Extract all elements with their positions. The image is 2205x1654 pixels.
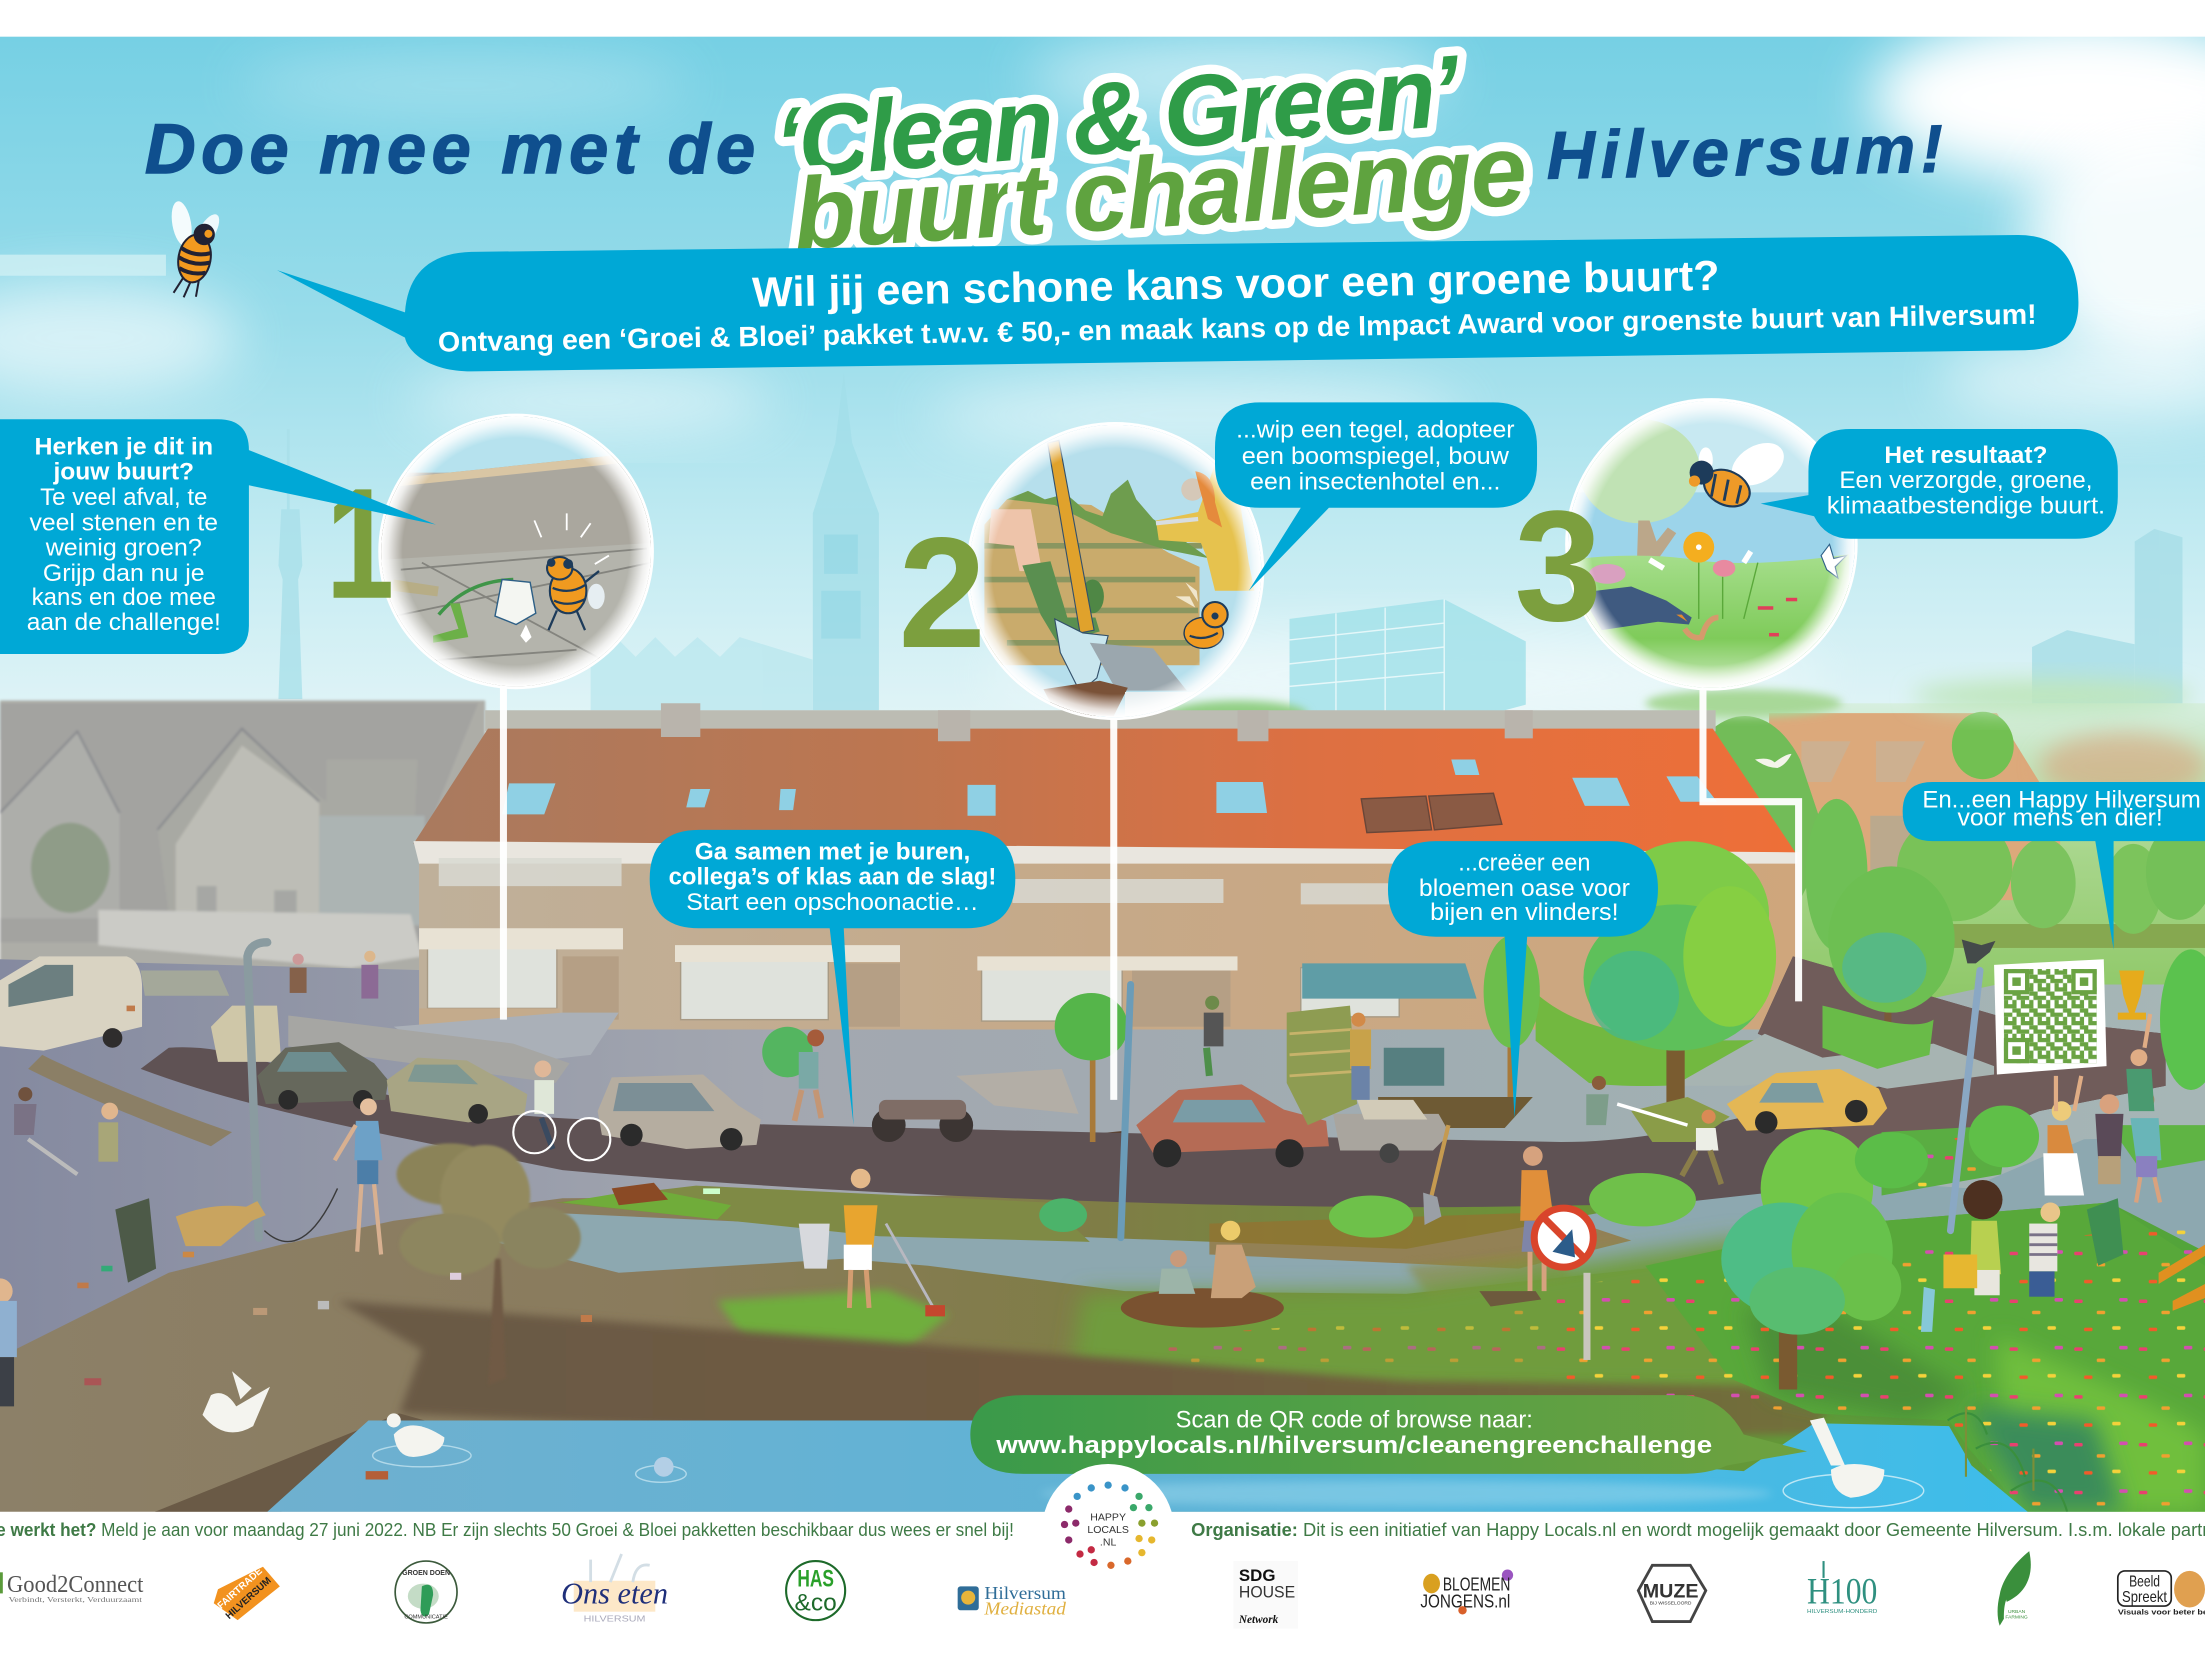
bubble: creeer een bloemen oase: bijen en vlinders!	[1430, 899, 1619, 926]
circle 1: litter illustration	[378, 414, 654, 689]
roof windows	[502, 760, 1717, 816]
logo: Bloemen Jongens: BLOEMEN	[1443, 1574, 1510, 1595]
bubble: scan qr code	[970, 1395, 1807, 1474]
logo: Muze: MUZE	[1643, 1581, 1698, 1603]
bubble: wip een tegel: ...wip een tegel, adopteer	[1236, 416, 1515, 443]
litter	[77, 1006, 720, 1385]
logo: Has & Co: HAS	[797, 1565, 834, 1592]
bubble: herken je dit	[0, 419, 436, 654]
logo: Groen Doen	[395, 1561, 457, 1623]
logo: Bloemen Jongens: JONGENS.nl	[1420, 1590, 1510, 1611]
bubble: ga samen: Start een opschoonactie…	[686, 889, 979, 916]
skyline: radio tower	[278, 429, 302, 699]
logo: H100: H100	[1807, 1570, 1877, 1611]
bubble: herken je dit: jouw buurt?	[52, 459, 194, 486]
person carrying plant	[762, 1027, 824, 1121]
bubble: ga samen: collega’s of klas aan de slag!	[669, 864, 996, 891]
logo: Has & Co	[786, 1561, 845, 1620]
bubble: creeer een bloemen oase: bloemen oase voor	[1419, 875, 1630, 902]
dog	[176, 1201, 266, 1246]
woman at pallet	[1350, 1013, 1371, 1100]
step numbers: 1	[326, 455, 394, 631]
skyline: right towers	[2032, 529, 2182, 707]
man with phone on the dog leash	[335, 1098, 382, 1254]
logo: Urban Farming leaf	[1998, 1551, 2031, 1626]
left-side people	[0, 1087, 118, 1406]
people cheering with QR code	[2043, 1014, 2161, 1202]
main speech bubble: Wil jij een schone kans voor een groene buurt?	[752, 252, 1720, 316]
text: hoe werkt het: Hoe werkt het? Meld je aan voor maandag 27 juni 2022. NB Er zijn slechts 50 Groei & Bloei pakketten beschikbaar dus wees er snel bij!	[0, 1519, 1014, 1540]
people by wall	[290, 951, 378, 999]
bubble: creeer een bloemen oase	[1388, 841, 1658, 1118]
logo: Urban Farming leaf: URBAN	[2008, 1609, 2026, 1615]
brown tree left	[397, 1143, 581, 1385]
running children	[1586, 1076, 1721, 1184]
pole lines connecting the circles	[503, 681, 1799, 1100]
circle 3: flower meadow illustration	[1565, 398, 1858, 695]
bubble: het resultaat: Het resultaat?	[1884, 442, 2048, 469]
logo: SDG House: HOUSE	[1239, 1583, 1295, 1602]
title: Hilversum!	[1546, 112, 1944, 194]
logo: Beeld Spreekt: Beeld	[2129, 1573, 2160, 1590]
white van	[0, 956, 142, 1051]
road	[28, 956, 2166, 1207]
trees in the background right	[1806, 799, 2205, 1069]
flowering green hill right	[1167, 1125, 2205, 1512]
background street right: houses and trees	[1167, 679, 2205, 999]
happy locals logo: LOCALS	[1087, 1524, 1129, 1536]
logo: Fairtrade Hilversum: HILVERSUM	[224, 1575, 274, 1622]
beige car	[387, 1058, 527, 1122]
skyline: office building	[1290, 599, 1526, 716]
street lamps	[248, 942, 1980, 1238]
parked cars	[0, 956, 1887, 1167]
logo: Urban Farming leaf: FARMING	[2005, 1615, 2028, 1621]
large tree centre right	[1583, 841, 1776, 1142]
bottom white band	[0, 1512, 2205, 1654]
flying bee with trail	[0, 197, 226, 302]
reeds at the water	[1948, 1406, 2067, 1512]
bin	[115, 1198, 156, 1283]
bubble: creeer een bloemen oase: ...creëer een	[1458, 850, 1590, 877]
logo: H100: HILVERSUM-HONDERD	[1807, 1609, 1877, 1615]
logo: Groen Doen: COMMUNICATIE	[404, 1615, 448, 1621]
paving	[0, 959, 2205, 1357]
front gardens and paths	[288, 993, 1810, 1150]
trophy	[2118, 970, 2146, 1020]
bird on lamp	[1962, 940, 1995, 963]
title	[145, 34, 1944, 271]
red car	[1136, 1084, 1329, 1153]
logo: Hilversum Mediastad: Mediastad	[983, 1598, 1066, 1618]
man on spade near house	[1204, 996, 1223, 1076]
logo: SDG House: Network	[1238, 1614, 1279, 1626]
grey car	[598, 1074, 761, 1149]
grass strips	[555, 1186, 1772, 1392]
bubble: herken je dit: Herken je dit in	[34, 433, 213, 460]
skyline: church	[591, 373, 879, 710]
QR code	[1994, 959, 2107, 1074]
bubble: happy hilversum: voor mens en dier!	[1958, 805, 2163, 832]
happy locals logo	[1042, 1464, 1174, 1596]
logo: SDG House	[1233, 1561, 1298, 1629]
logo: Bloemen Jongens	[1420, 1570, 1513, 1614]
bubble: wip een tegel	[1215, 402, 1537, 591]
logo: Ons eten: HILVERSUM	[584, 1614, 645, 1624]
trailer	[1333, 1114, 1450, 1150]
bushes	[1039, 1105, 2039, 1238]
dark river bank	[155, 1301, 1828, 1512]
upper windows	[439, 858, 1399, 904]
logo: Groen Doen: GROEN DOEN	[402, 1570, 450, 1577]
bubble: herken je dit: Grijp dan nu je	[43, 560, 205, 587]
bubble: wip een tegel: een boomspiegel, bouw	[1242, 443, 1510, 470]
motorbike	[872, 1108, 906, 1142]
step numbers	[326, 455, 1602, 681]
sidewalk below road	[478, 1136, 2205, 1294]
logo: H100	[1807, 1561, 1877, 1615]
bubble: herken je dit: kans en doe mee	[32, 584, 216, 611]
title: ‘Clean & Green’	[771, 34, 1465, 201]
logo: Ons eten: Ons eten	[561, 1575, 668, 1610]
happy locals logo: HAPPY	[1090, 1511, 1126, 1523]
bubble: herken je dit: aan de challenge!	[27, 609, 221, 636]
bubble: ga samen: Ga samen met je buren,	[695, 838, 970, 865]
main speech bubble: Ontvang een ‘Groei & Bloei’ pakket t.w.v. € 50,- en maak kans op de Impact Award voor groenste buurt van Hilversum!	[438, 299, 2037, 358]
logo: Hilversum Mediastad: Hilversum	[984, 1583, 1066, 1603]
young tree centre	[1055, 993, 1128, 1142]
bubble: herken je dit: Te veel afval, te	[40, 484, 207, 511]
spade near grass	[1423, 1125, 1448, 1225]
tree at right edge	[2160, 949, 2205, 1090]
chimneys	[661, 703, 1533, 741]
step numbers: 3	[1514, 478, 1602, 654]
circle 2: tile and insect hotel illustration	[966, 422, 1264, 720]
bubble: het resultaat: Een verzorgde, groene,	[1839, 467, 2092, 494]
bench	[2159, 1245, 2205, 1311]
bubble: happy hilversum: En...een Happy Hilversum	[1922, 786, 2201, 813]
bubble: het resultaat	[1761, 429, 2118, 539]
main speech bubble	[277, 235, 2078, 371]
row of houses	[413, 703, 1800, 1030]
title: Doe mee met de	[145, 109, 755, 188]
logo: SDG House: SDG	[1239, 1566, 1275, 1585]
logo: Good2Connect: Verbindt, Versterkt, Verduurzaamt	[8, 1595, 143, 1604]
people	[0, 754, 2205, 1406]
title: buurt challenge	[790, 113, 1530, 271]
logo: Good2Connect: Good2Connect	[7, 1572, 144, 1598]
green car	[257, 1042, 388, 1104]
happy locals logo: .NL	[1100, 1537, 1116, 1549]
logo: Muze	[1638, 1565, 1706, 1622]
lower green tree	[1721, 1129, 1901, 1390]
logo: Ons eten	[561, 1554, 668, 1624]
bubble: scan qr code: www.happylocals.nl/hilversum/cleanengreenchallenge	[995, 1432, 1712, 1459]
bubble: ga samen	[650, 830, 1015, 1125]
solar panels	[1361, 793, 1502, 833]
ducks	[202, 1371, 1884, 1498]
logo: Has & Co: &co	[795, 1589, 837, 1616]
ground base	[0, 1027, 2205, 1512]
people planting	[1121, 1221, 1284, 1328]
logo: Fairtrade Hilversum: FAIRTRADE	[216, 1566, 265, 1612]
pallet insect hotel and chalkboard	[1287, 1006, 1444, 1125]
bubble: wip een tegel: een insectenhotel en...	[1250, 469, 1500, 496]
bubble: het resultaat: klimaatbestendige buurt.	[1827, 492, 2105, 519]
logo: Beeld Spreekt	[2118, 1571, 2205, 1616]
lower bay windows	[428, 945, 1399, 1021]
yellow car	[1727, 1069, 1887, 1131]
grey houses left	[0, 700, 485, 982]
gull	[1755, 754, 1792, 768]
man with litter picker	[799, 1169, 945, 1316]
water	[267, 1420, 2028, 1512]
tree by garden	[1484, 935, 1540, 1097]
logo: Fairtrade Hilversum	[214, 1566, 280, 1622]
bubble: scan qr code: Scan de QR code of browse naar:	[1176, 1406, 1533, 1433]
prohibition sign	[1534, 1208, 1593, 1360]
waterer, boy and bin	[1921, 1180, 2123, 1332]
logo: Hilversum Mediastad	[958, 1583, 1066, 1618]
logo: Muze: BIJ WISSELOORD	[1650, 1601, 1692, 1607]
awnings and doors	[419, 928, 1238, 970]
man on chair with no-sign	[1479, 1146, 1554, 1307]
logo: Beeld Spreekt: Spreekt	[2122, 1589, 2168, 1606]
step numbers: 2	[898, 505, 986, 681]
bubble: happy hilversum	[1903, 782, 2205, 949]
cyclist	[513, 1060, 610, 1160]
bubble: herken je dit: veel stenen en te	[30, 509, 218, 536]
bubble: herken je dit: weinig groen?	[45, 535, 202, 562]
